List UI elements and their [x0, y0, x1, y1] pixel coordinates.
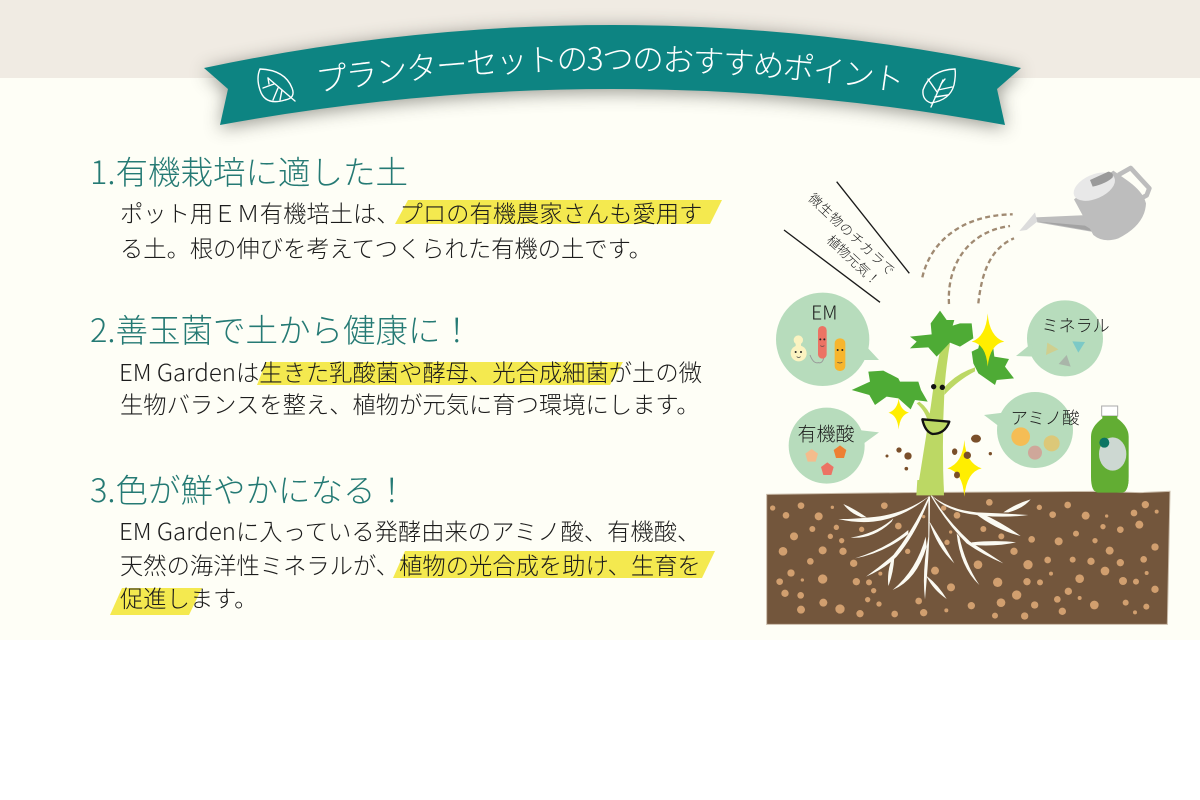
sparkles [888, 313, 1004, 497]
icon: watering can [1019, 167, 1149, 240]
bubble: minerals [1016, 300, 1110, 376]
heading 2: 2.善玉菌で土から健康に！ [90, 305, 473, 352]
bubble: EM [776, 293, 879, 386]
slanted caption: 微生物のチカラで [805, 188, 900, 279]
icon: circles [1011, 427, 1060, 460]
body 2: EM Gardenは生きた乳酸菌や酵母、光合成細菌が土の微 [119, 354, 702, 388]
bubble: organic acid: 有機酸 [798, 420, 854, 447]
icon: triangles [1046, 341, 1085, 367]
face [922, 384, 949, 434]
bubble: EM: EM [811, 297, 837, 325]
roots [838, 496, 1031, 599]
title banner [200, 16, 1025, 138]
highlights 3 [110, 551, 715, 615]
body 3: 促進します。 [120, 580, 257, 614]
water arcs [922, 214, 1014, 304]
body 3: EM Gardenに入っている発酵由来のアミノ酸、有機酸、 [119, 513, 700, 547]
bottle base [1092, 480, 1129, 493]
section 1 [90, 147, 722, 264]
stem base [916, 480, 944, 495]
icon: pentagons [805, 445, 846, 475]
sparkle tip [962, 480, 966, 497]
slanted caption: 植物元気！ [823, 230, 885, 289]
body 3 [119, 513, 701, 614]
body 2: 生物バランスを整え、植物が元気に育つ環境にします。 [120, 386, 700, 420]
icon: left leaf [258, 69, 295, 102]
bubble: organic acid [789, 408, 879, 484]
soil specks [885, 435, 992, 478]
body 1: る土。根の伸びを考えてつくられた有機の土です。 [120, 230, 652, 264]
section 3 [90, 465, 715, 615]
bubble: amino acid [984, 392, 1079, 468]
body 1: ポット用ＥＭ有機培土は、プロの有機農家さんも愛用す [120, 195, 702, 229]
bottle [1091, 406, 1129, 493]
speech lines [784, 182, 909, 302]
icon: right leaf [923, 69, 955, 107]
icon: microbes [791, 326, 845, 371]
soil particles [770, 499, 1159, 620]
soil block [767, 491, 1170, 624]
highlight 2 [257, 362, 623, 385]
plant [852, 311, 1014, 495]
title text: プランターセットの3つのおすすめポイント [319, 46, 899, 92]
illustration: plant and watering can [776, 167, 1149, 497]
heading 3: 3.色が鮮やかになる！ [90, 465, 408, 512]
heading 1: 1.有機栽培に適した土 [90, 147, 408, 194]
body 3: 天然の海洋性ミネラルが、植物の光合成を助け、生育を [120, 547, 701, 581]
section 2 [90, 305, 702, 420]
leaves [852, 311, 1014, 409]
bubble: amino acid: アミノ酸 [1011, 404, 1079, 429]
bubble: minerals: ミネラル [1042, 312, 1110, 337]
highlight 1 [395, 200, 722, 224]
stem [917, 343, 975, 495]
body 1 [120, 195, 702, 264]
soil cross-section [767, 480, 1170, 624]
body 2 [119, 354, 702, 420]
